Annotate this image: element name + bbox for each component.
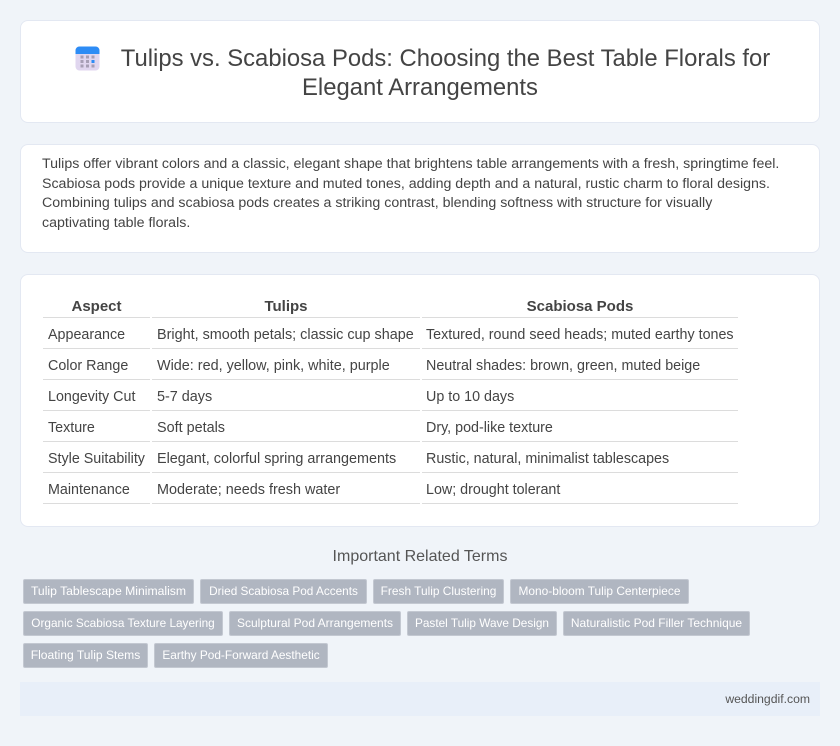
intro text: captivating table florals. (42, 215, 190, 231)
row: Color Range: Wide: red, yellow, pink, white, purple (157, 358, 390, 374)
row: Style Suitability: Rustic, natural, minimalist tablescapes (426, 451, 669, 467)
icon: calendar (76, 46, 100, 70)
tag (510, 579, 689, 604)
tag: Tulip Tablescape Minimalism (31, 584, 186, 598)
intro text (42, 156, 779, 231)
related terms tags (23, 579, 750, 668)
tag: Pastel Tulip Wave Design (415, 616, 549, 630)
related terms heading: Important Related Terms (333, 548, 507, 565)
row: Appearance (48, 327, 734, 343)
tag: Earthy Pod-Forward Aesthetic (162, 648, 320, 662)
tag: Mono-bloom Tulip Centerpiece (519, 584, 680, 598)
row: Maintenance: Maintenance (48, 482, 130, 498)
row: Longevity Cut (48, 389, 514, 405)
intro text: Scabiosa pods provide a unique texture and muted tones, adding depth and a natural, rustic charm to floral designs. (42, 176, 770, 192)
row: Appearance: Textured, round seed heads; muted earthy tones (426, 327, 734, 343)
tag: Dried Scabiosa Pod Accents (209, 584, 358, 598)
row: Maintenance: Moderate; needs fresh water (157, 482, 340, 498)
row: Longevity Cut: 5-7 days (157, 389, 212, 405)
tag: Floating Tulip Stems (31, 648, 140, 662)
row: Style Suitability: Elegant, colorful spring arrangements (157, 451, 396, 467)
row: Texture: Soft petals (157, 420, 225, 436)
footer source: weddingdif.com (725, 692, 810, 706)
tag: Fresh Tulip Clustering (381, 584, 496, 598)
tag (407, 611, 557, 636)
row: Maintenance: Low; drought tolerant (426, 482, 560, 498)
header card (20, 20, 820, 123)
tag (154, 643, 328, 668)
row: Texture (48, 420, 553, 436)
tag: Organic Scabiosa Texture Layering (31, 616, 215, 630)
row: Style Suitability: Style Suitability (48, 451, 145, 467)
tag (229, 611, 401, 636)
intro card (20, 144, 820, 253)
footer bar (20, 682, 820, 716)
title (121, 45, 770, 101)
table card (20, 274, 820, 527)
row: Color Range: Color Range (48, 358, 128, 374)
tag (23, 643, 148, 668)
row: Texture: Texture (48, 420, 95, 436)
header: Tulips: Tulips (264, 298, 308, 315)
row: Color Range (48, 358, 700, 374)
comparison table (43, 298, 738, 504)
row: Longevity Cut: Longevity Cut (48, 389, 135, 405)
tag (373, 579, 504, 604)
row: Maintenance (48, 482, 560, 498)
intro text: Combining tulips and scabiosa pods creates a striking contrast, blending softness with structure for visually (42, 195, 712, 211)
tag (563, 611, 750, 636)
header: Aspect: Aspect (71, 298, 122, 315)
row: Appearance: Appearance (48, 327, 125, 343)
row: Style Suitability (48, 451, 669, 467)
title: Tulips vs. Scabiosa Pods: Choosing the Best Table Florals for (121, 45, 770, 72)
tag (200, 579, 367, 604)
row: Color Range: Neutral shades: brown, green, muted beige (426, 358, 700, 374)
row: Texture: Dry, pod-like texture (426, 420, 553, 436)
header: Scabiosa Pods: Scabiosa Pods (527, 298, 633, 315)
row: Longevity Cut: Up to 10 days (426, 389, 514, 405)
tag: Sculptural Pod Arrangements (237, 616, 393, 630)
tag (23, 611, 223, 636)
tag: Naturalistic Pod Filler Technique (571, 616, 742, 630)
tag (23, 579, 194, 604)
title: Elegant Arrangements (302, 74, 538, 101)
row: Appearance: Bright, smooth petals; classic cup shape (157, 327, 414, 343)
intro text: Tulips offer vibrant colors and a classic, elegant shape that brightens table arrangements with a fresh, springtime feel. (42, 156, 779, 172)
